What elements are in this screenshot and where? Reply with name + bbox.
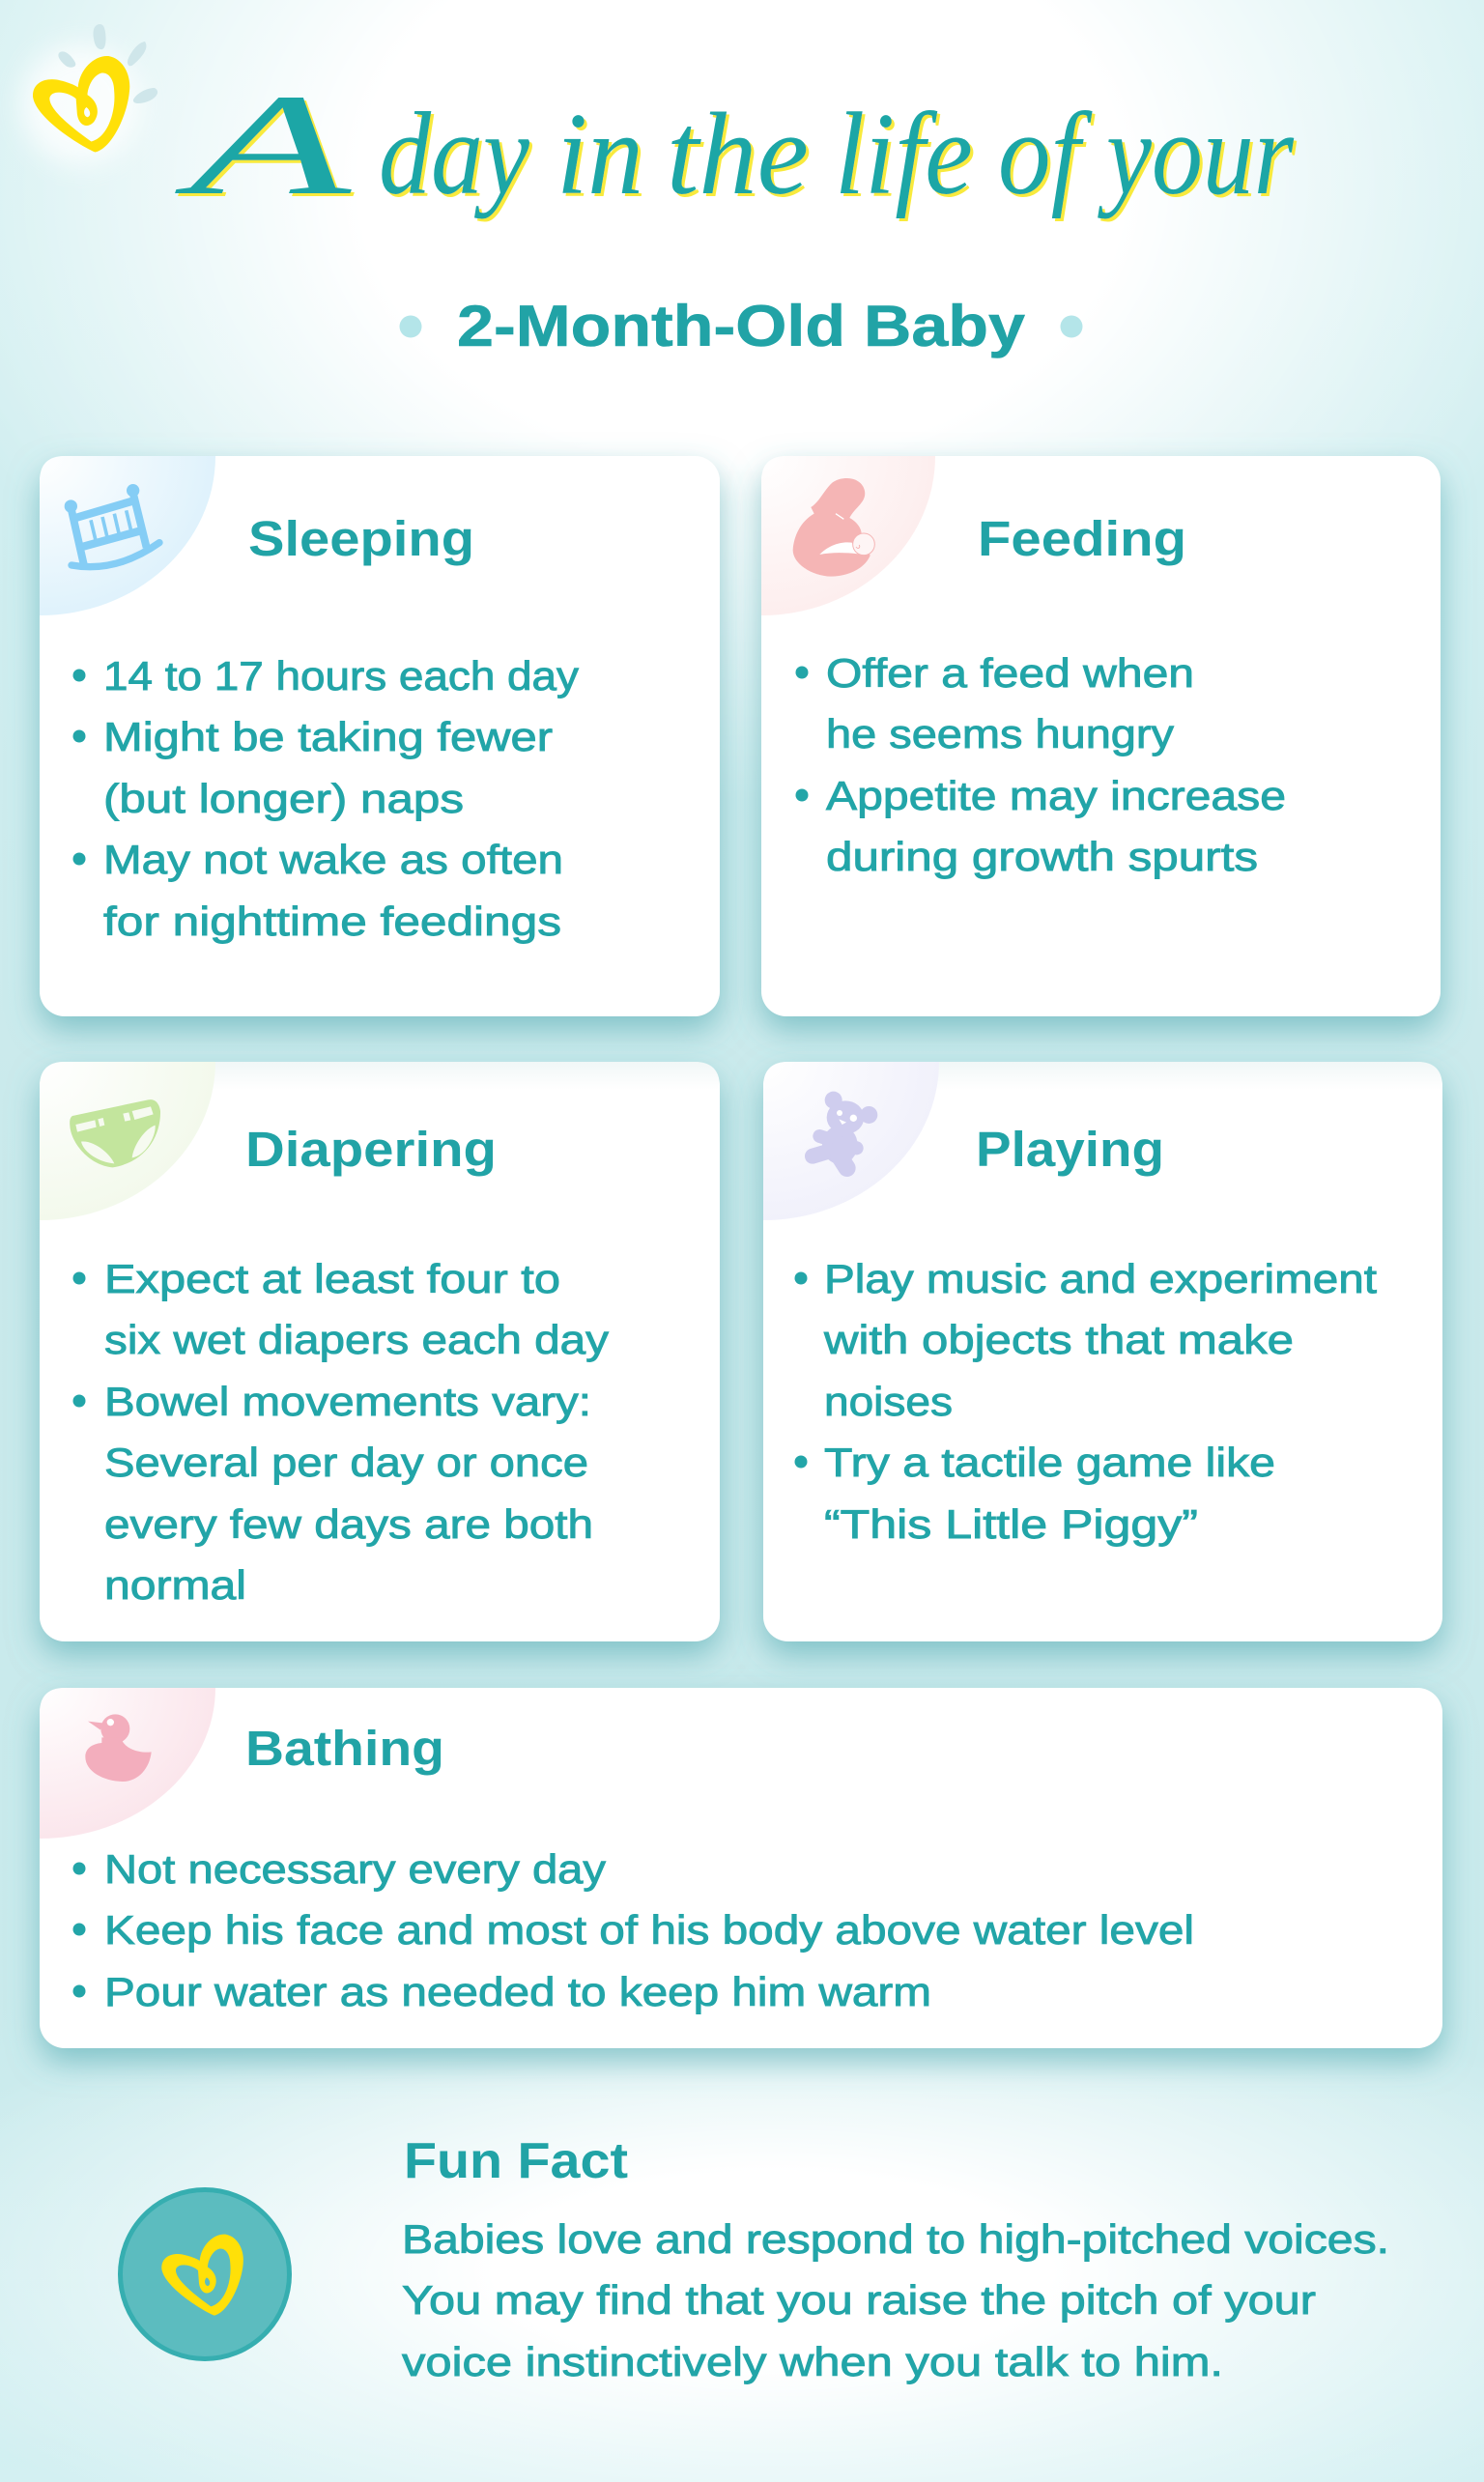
heading: fun fact: Fun Fact <box>404 2133 628 2189</box>
title: your <box>1097 89 1294 219</box>
icon backdrop: playing <box>763 1062 939 1220</box>
list: sleeping: (but longer) naps <box>103 776 464 821</box>
list: playing: noises <box>824 1379 953 1424</box>
subtitle: 2-Month-Old Baby <box>457 294 1026 358</box>
panel: playing <box>763 1062 1442 1641</box>
list: sleeping: May not wake as often <box>103 837 563 882</box>
text: fun fact <box>402 2216 1389 2384</box>
icon backdrop: bathing <box>40 1688 215 1839</box>
heading: feeding: Feeding <box>978 511 1186 566</box>
list: sleeping: 14 to 17 hours each day <box>103 653 579 699</box>
panel: bathing <box>40 1688 1442 2048</box>
icon: diaper <box>70 1099 160 1167</box>
heading: playing: Playing <box>976 1122 1164 1177</box>
panel: diapering <box>40 1062 720 1641</box>
title: the <box>667 89 809 219</box>
list: sleeping: for nighttime feedings <box>103 899 561 944</box>
list: bathing: Not necessary every day <box>104 1846 606 1892</box>
title: in <box>556 89 643 219</box>
list: playing <box>794 1256 1377 1547</box>
icon backdrop: diapering <box>40 1062 215 1220</box>
list: bathing <box>73 1846 1194 2014</box>
list: sleeping <box>73 653 579 944</box>
text: fun fact: You may find that you raise the pitch of your <box>402 2277 1316 2323</box>
list: playing: Try a tactile game like <box>824 1440 1275 1485</box>
icon backdrop: feeding <box>761 456 935 615</box>
title: A <box>174 65 353 225</box>
list: diapering: every few days are both <box>104 1501 593 1547</box>
list: playing: with objects that make <box>823 1317 1294 1362</box>
panel: feeding <box>761 456 1441 1016</box>
panel: sleeping <box>40 456 720 1016</box>
list: diapering <box>73 1256 609 1608</box>
title <box>174 65 1294 225</box>
icon: nursing mother <box>793 478 874 577</box>
title: day <box>379 89 530 219</box>
text: fun fact: voice instinctively when you talk to him. <box>402 2339 1223 2384</box>
list: diapering: Expect at least four to <box>104 1256 560 1301</box>
icon: teddy bear <box>813 1092 877 1168</box>
list: playing: “This Little Piggy” <box>824 1501 1198 1547</box>
list: feeding: Appetite may increase <box>826 773 1286 818</box>
list: playing: Play music and experiment <box>824 1256 1377 1301</box>
title: life <box>835 89 973 219</box>
list: diapering: Several per day or once <box>104 1440 588 1485</box>
list: sleeping: Might be taking fewer <box>103 714 553 759</box>
list: feeding: Offer a feed when <box>826 650 1194 696</box>
icon backdrop: sleeping <box>40 456 215 615</box>
list: diapering: Bowel movements vary: <box>104 1379 591 1424</box>
list: feeding: during growth spurts <box>826 834 1258 879</box>
icon: crib <box>65 484 159 567</box>
heading: sleeping: Sleeping <box>248 511 474 566</box>
list: diapering: normal <box>104 1562 246 1608</box>
list: bathing: Pour water as needed to keep him warm <box>104 1969 931 2014</box>
list: bathing: Keep his face and most of his body above water level <box>104 1907 1194 1953</box>
list: feeding: he seems hungry <box>826 711 1174 756</box>
icon: rubber duck <box>85 1714 152 1782</box>
heading: bathing: Bathing <box>245 1721 444 1776</box>
text: fun fact: Babies love and respond to high-pitched voices. <box>402 2216 1389 2262</box>
title: of <box>998 89 1093 219</box>
heading: diapering: Diapering <box>245 1122 497 1177</box>
icon: Pampers heart logo <box>21 24 157 164</box>
list: diapering: six wet diapers each day <box>104 1317 609 1362</box>
list: feeding <box>796 650 1286 879</box>
icon: fun fact heart badge <box>120 2189 290 2359</box>
